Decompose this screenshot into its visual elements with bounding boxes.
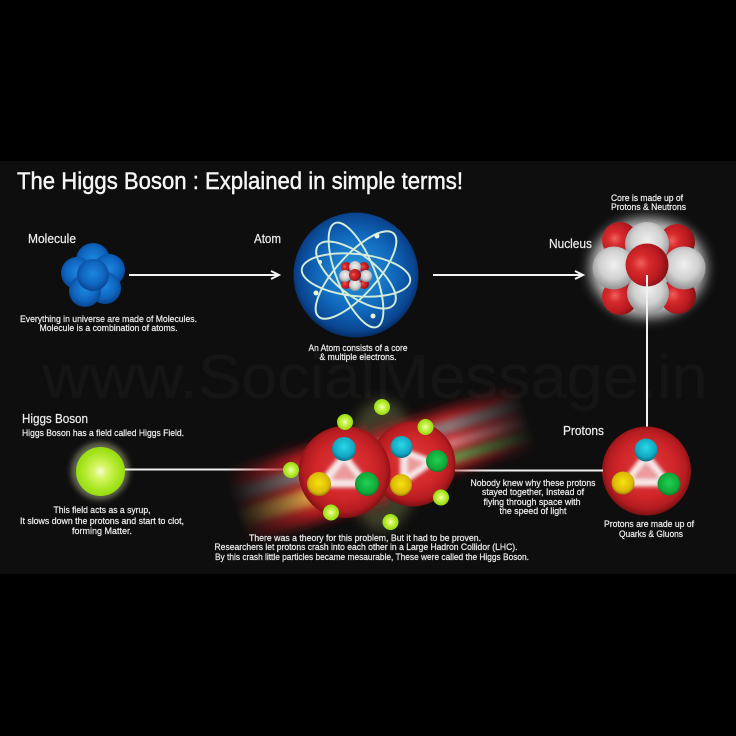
title: The Higgs Boson : Explained in simple terms! [17,168,463,195]
protons label: Protons [563,423,604,438]
atom description: & multiple electrons. [320,352,396,363]
collider explanation: By this crash little particles became mesaurable, These were called the Higgs Boson. [215,552,529,563]
protons description: Quarks & Gluons [619,529,683,540]
proton right [370,422,456,506]
connector: higgs to collision [125,468,292,470]
background panel [0,161,736,574]
question text: Nobody knew why these protons [470,478,596,489]
section: protons [563,423,694,540]
section: molecule [20,231,197,334]
icon: higgs particle [71,442,129,500]
nucleus note: Protons & Neutrons [611,202,686,213]
collider explanation: Researchers let protons crash into each other in a Large Hadron Collidor (LHC). [214,542,518,553]
higgs description: It slows down the protons and start to clot, [20,516,184,527]
collision illustration [223,384,540,543]
section: nucleus [549,193,706,318]
question text: stayed together, Instead of [482,487,584,498]
arrow: molecule to atom [129,271,279,279]
atom core [339,261,372,291]
molecule description: Molecule is a combination of atoms. [40,323,178,334]
molecule description: Everything in universe are made of Molecules. [20,314,197,325]
atom description: An Atom consists of a core [308,343,408,354]
section: higgs boson [20,411,184,537]
question text: the speed of light [500,506,567,517]
icon: atom sphere [294,212,418,338]
icon: proton with quarks [602,426,691,516]
connector: nucleus to protons [646,275,648,428]
protons description: Protons are made up of [604,519,694,530]
higgs label: Higgs Boson [22,411,88,426]
arrow: atom to nucleus [433,271,583,279]
question text: flying through space with [484,497,580,508]
icon: molecule cluster [61,243,125,307]
nucleus note: Core is made up of [611,193,683,204]
atom label: Atom [254,231,281,246]
electron orbits [300,216,412,334]
collider explanation: There was a theory for this problem, But it had to be proven. [249,533,481,544]
proton left [298,426,390,518]
watermark: www.SocialMessage.in [41,343,708,412]
higgs note: Higgs Boson has a field called Higgs Field. [22,428,184,439]
electrons [314,234,380,318]
higgs description: forming Matter. [72,526,132,537]
higgs particles [283,399,449,530]
molecule label: Molecule [28,231,76,246]
nucleus label: Nucleus [549,236,592,251]
section: atom [254,212,418,363]
motion streaks [223,384,540,543]
connector: collision to proton [455,470,603,472]
icon: nucleus cluster [590,218,706,318]
higgs description: This field acts as a syrup, [54,505,150,516]
